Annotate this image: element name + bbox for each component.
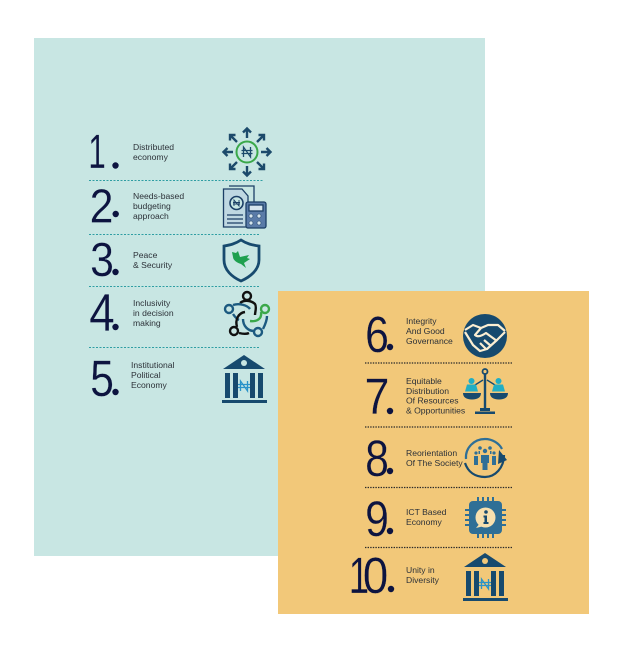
text: equitable distribution of resources and opportunities: Equitable	[406, 376, 442, 386]
text: institutional political economy: Economy	[131, 380, 168, 390]
text: unity in diversity: Diversity	[406, 575, 440, 585]
icon: circular arrow with group	[465, 439, 507, 477]
number 3: 3	[90, 233, 114, 287]
text: institutional political economy: Political	[131, 370, 161, 380]
text: ICT based economy: ICT Based	[406, 507, 446, 517]
icon: handshake	[463, 314, 507, 358]
text: needs-based budgeting approach: Needs-based	[133, 191, 184, 201]
text: integrity and good governance: Integrity	[406, 316, 437, 326]
icon: inclusive network of people	[225, 292, 269, 336]
number 10: 1	[349, 548, 369, 604]
number 7: 7	[365, 369, 389, 426]
number 2: 2	[90, 179, 113, 233]
text: inclusivity in decision making: making	[133, 318, 161, 328]
text: needs-based budgeting approach: approach	[133, 211, 169, 221]
text: peace and security: Peace	[133, 250, 157, 260]
text: peace and security: & Security	[133, 260, 173, 270]
icon: shield with dove	[224, 240, 259, 281]
number 10: 0	[363, 548, 388, 605]
panel: teal background	[34, 38, 485, 556]
text: integrity and good governance: Governance	[406, 336, 453, 346]
icon: institution building with naira	[222, 355, 267, 403]
text: distributed economy: economy	[133, 152, 169, 162]
text: distributed economy: Distributed	[133, 142, 174, 152]
text: equitable distribution of resources and opportunities: & Opportunities	[406, 405, 465, 415]
text: reorientation of the society: Reorientation	[406, 448, 457, 458]
text: unity in diversity: Unity in	[406, 565, 435, 575]
text: inclusivity in decision making: Inclusivity	[133, 298, 170, 308]
text: reorientation of the society: Of The Society	[406, 458, 463, 468]
text: inclusivity in decision making: in decision	[133, 308, 174, 318]
number 1: 1	[88, 124, 106, 179]
number 1	[88, 124, 119, 179]
number 10	[349, 548, 394, 605]
icon: budget document and calculator	[224, 186, 266, 228]
text: ICT based economy: Economy	[406, 517, 443, 527]
text: equitable distribution of resources and opportunities: Distribution	[406, 386, 449, 396]
number 6: 6	[365, 305, 389, 363]
icon: balance scale with people	[463, 369, 508, 414]
text: integrity and good governance: And Good	[406, 326, 445, 336]
text: institutional political economy: Institutional	[131, 360, 174, 370]
icon: building with naira	[463, 553, 508, 601]
panel: orange background	[278, 291, 589, 614]
number 9: 9	[365, 491, 389, 547]
icon: naira with radiating arrows	[224, 128, 270, 176]
number 4: 4	[89, 284, 115, 343]
number 8: 8	[365, 429, 389, 487]
text: needs-based budgeting approach: budgeting	[133, 201, 171, 211]
number 5: 5	[90, 349, 114, 407]
text: equitable distribution of resources and opportunities: Of Resources	[406, 396, 459, 406]
icon: information chip	[465, 497, 506, 538]
